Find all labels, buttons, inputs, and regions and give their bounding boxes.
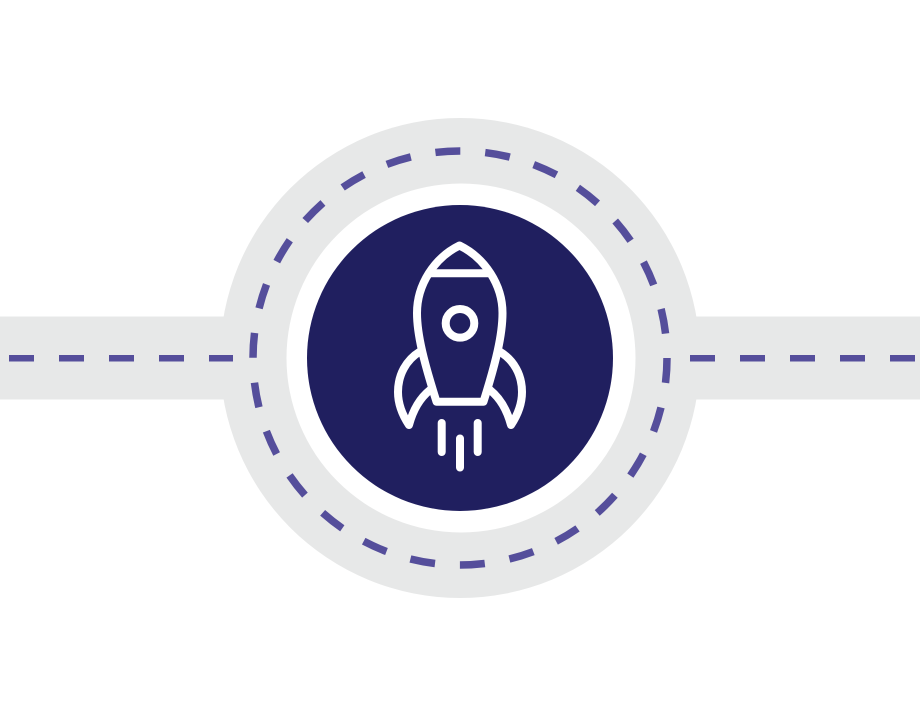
right dashed road line xyxy=(690,355,915,362)
right fin xyxy=(490,352,522,425)
rocket window xyxy=(446,309,474,338)
icon: rocket xyxy=(398,246,522,468)
outer grey ring xyxy=(220,118,700,598)
rocket nose divider xyxy=(431,269,488,277)
left dashed road line xyxy=(9,355,233,362)
dashed circular track xyxy=(253,151,667,565)
road band xyxy=(0,316,920,400)
inner white circle xyxy=(286,184,636,532)
exhaust flames xyxy=(442,423,478,468)
rocket body xyxy=(417,246,502,402)
navy centre disc xyxy=(307,205,613,511)
left fin xyxy=(398,352,430,425)
